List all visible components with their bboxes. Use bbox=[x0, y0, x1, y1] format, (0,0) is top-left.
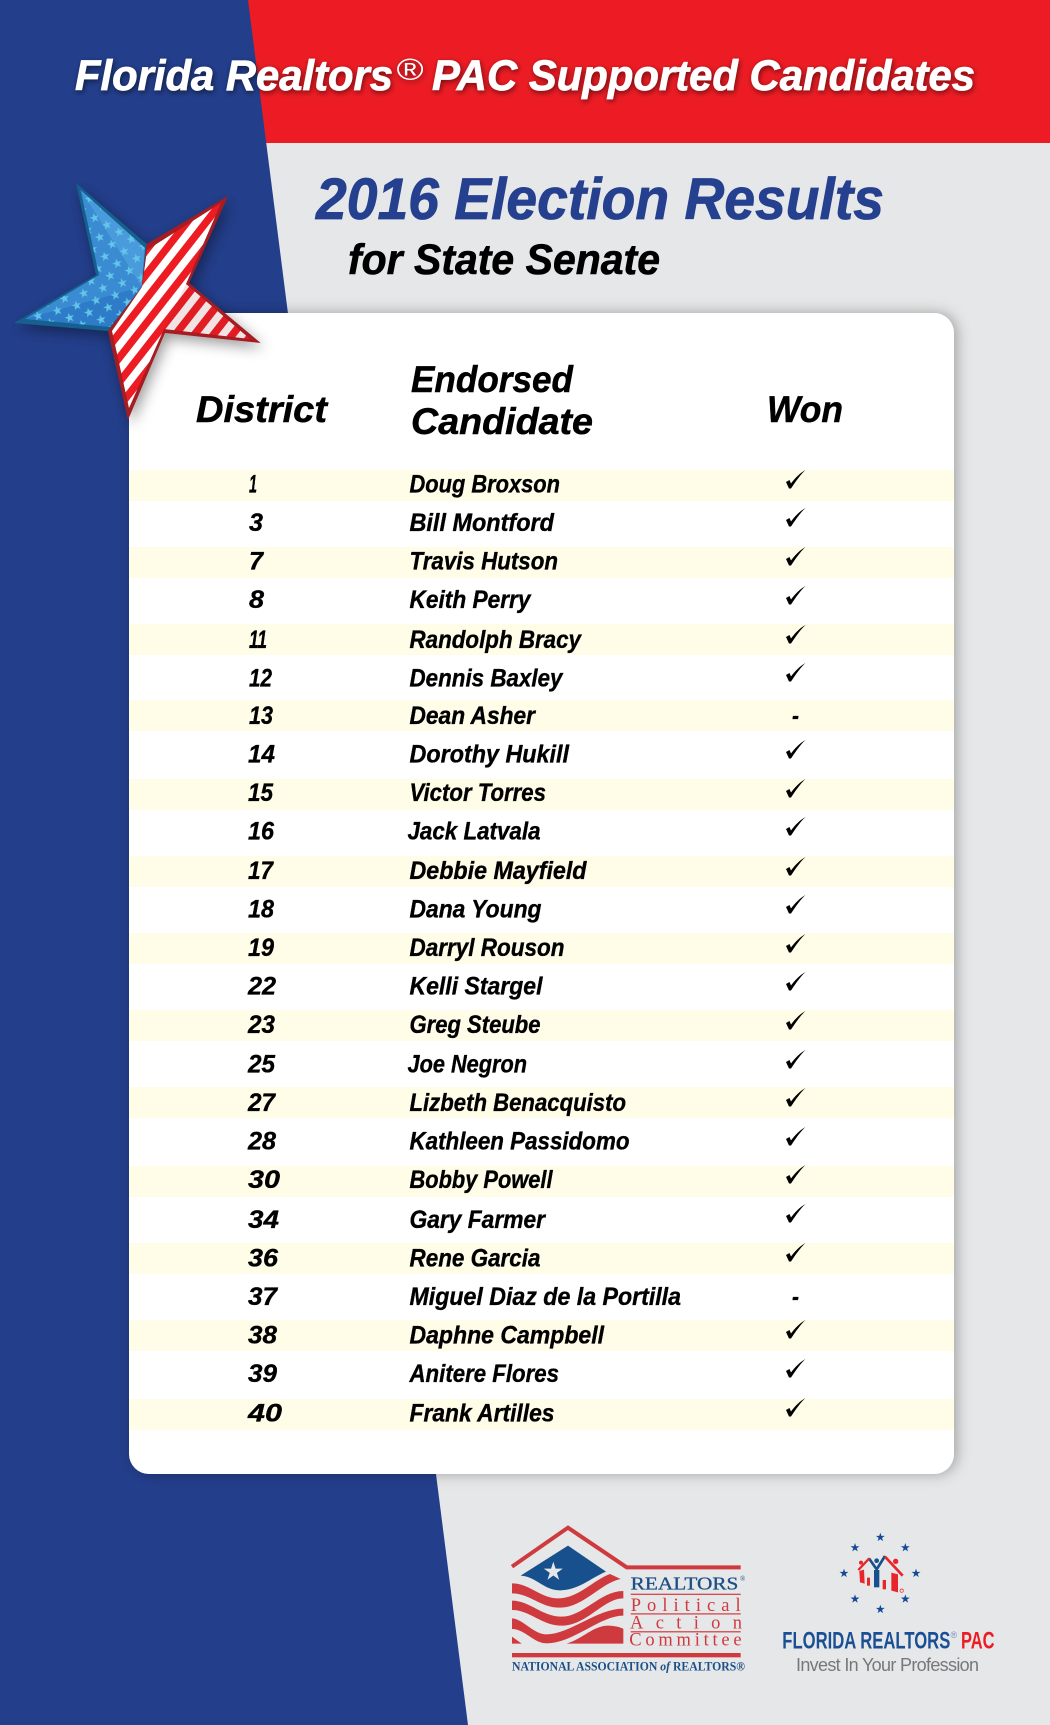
row: district 1: Doug Broxson bbox=[410, 471, 560, 499]
row: district 7: Travis Hutson bbox=[410, 548, 558, 576]
row: district 15: 15 bbox=[248, 779, 274, 807]
row: district 23 bbox=[247, 1011, 805, 1039]
row: district 37: - bbox=[792, 1283, 799, 1311]
row: district 27: 27 bbox=[247, 1089, 276, 1117]
row: district 25: 25 bbox=[247, 1051, 276, 1079]
row: district 14 bbox=[248, 740, 806, 768]
row: district 11: Randolph Bracy bbox=[410, 626, 582, 654]
row: district 28: Kathleen Passidomo bbox=[410, 1128, 630, 1156]
table row bands bbox=[129, 470, 954, 1430]
logo: Florida Realtors PAC: FLORIDA REALTORS bbox=[782, 1627, 950, 1654]
logo: Florida Realtors PAC: Invest In Your Profession bbox=[796, 1655, 979, 1675]
blue diagonal panel bbox=[0, 0, 468, 1725]
row: district 18: 18 bbox=[248, 896, 274, 924]
row: district 7 bbox=[249, 547, 806, 576]
row: district 16: 16 bbox=[248, 817, 275, 845]
row: district 25 bbox=[247, 1050, 805, 1079]
row: district 19: 19 bbox=[248, 934, 274, 962]
row: district 22 bbox=[247, 972, 805, 1000]
row: district 38: 38 bbox=[248, 1321, 277, 1349]
row: district 30: Bobby Powell bbox=[410, 1166, 553, 1194]
column header: Won: Won bbox=[767, 389, 843, 430]
row: district 23: 23 bbox=[247, 1011, 275, 1039]
row: district 36: 36 bbox=[248, 1244, 279, 1272]
row: district 13: 13 bbox=[249, 702, 273, 730]
logo: Florida Realtors PAC bbox=[782, 1533, 994, 1675]
row: district 14: 14 bbox=[248, 740, 275, 768]
row: district 34: Gary Farmer bbox=[410, 1206, 546, 1234]
row: district 15: Victor Torres bbox=[410, 779, 546, 807]
row: district 22: 22 bbox=[247, 972, 276, 1000]
row: district 19 bbox=[248, 934, 806, 962]
row: district 37: Miguel Diaz de la Portilla bbox=[410, 1283, 681, 1311]
row: district 37: 37 bbox=[248, 1283, 278, 1311]
row: district 16: Jack Latvala bbox=[408, 817, 541, 845]
row: district 40: Frank Artilles bbox=[410, 1400, 555, 1428]
row: district 16 bbox=[248, 817, 806, 845]
row: district 13: - bbox=[792, 702, 799, 730]
row: district 39: 39 bbox=[248, 1360, 277, 1388]
row: district 34: 34 bbox=[248, 1206, 279, 1234]
row: district 38: Daphne Campbell bbox=[410, 1321, 605, 1349]
row: district 15 bbox=[248, 779, 806, 807]
row: district 1: 1 bbox=[249, 471, 257, 499]
row: district 8: 8 bbox=[249, 586, 264, 614]
row: district 23: Greg Steube bbox=[410, 1011, 541, 1039]
title bbox=[75, 52, 975, 100]
row: district 17 bbox=[248, 857, 806, 885]
row: district 3: Bill Montford bbox=[410, 509, 555, 537]
row: district 38 bbox=[248, 1320, 806, 1349]
row: district 27 bbox=[247, 1088, 805, 1117]
row: district 27: Lizbeth Benacquisto bbox=[410, 1089, 626, 1117]
row: district 34 bbox=[248, 1204, 806, 1234]
logo: Florida Realtors PAC: PAC bbox=[961, 1627, 994, 1654]
row: district 11: 11 bbox=[249, 626, 267, 654]
subheading: for State Senate: for State Senate bbox=[348, 236, 660, 284]
row: district 13 bbox=[249, 702, 799, 730]
column header: District: District bbox=[196, 389, 329, 430]
row: district 12: 12 bbox=[249, 664, 272, 692]
title: PAC Supported Candidates bbox=[432, 52, 975, 100]
row: district 18: Dana Young bbox=[410, 896, 542, 924]
logo: Florida Realtors PAC: ® bbox=[950, 1630, 958, 1640]
row: district 7: 7 bbox=[249, 548, 264, 576]
row: district 40 bbox=[247, 1398, 806, 1428]
logo wordmark: Action bbox=[630, 1613, 742, 1633]
panel: results table card bbox=[129, 313, 954, 1474]
row: district 30: 30 bbox=[248, 1166, 280, 1194]
title: Florida Realtors bbox=[75, 52, 393, 100]
column header: Endorsed Candidate: Endorsed bbox=[411, 359, 574, 400]
title: ® bbox=[396, 52, 423, 87]
heading: 2016 Election Results: 2016 Election Results bbox=[315, 167, 884, 232]
row: district 8: Keith Perry bbox=[410, 586, 531, 614]
row: district 36 bbox=[248, 1243, 806, 1272]
row: district 8 bbox=[249, 586, 806, 614]
row: district 40: 40 bbox=[247, 1400, 282, 1428]
row: district 1 bbox=[249, 470, 806, 499]
row: district 37 bbox=[248, 1283, 799, 1311]
row: district 36: Rene Garcia bbox=[410, 1244, 541, 1272]
logo wordmark bbox=[512, 1574, 746, 1673]
column header: Endorsed Candidate bbox=[411, 359, 593, 442]
logo wordmark: ® bbox=[740, 1575, 746, 1583]
logo wordmark: Political bbox=[631, 1596, 741, 1616]
row: district 25: Joe Negron bbox=[408, 1051, 527, 1079]
icon: stars and houses bbox=[840, 1533, 920, 1613]
row: district 12 bbox=[249, 663, 806, 692]
row: district 28: 28 bbox=[247, 1128, 276, 1156]
row: district 3 bbox=[249, 508, 806, 537]
row: district 22: Kelli Stargel bbox=[410, 972, 543, 1000]
icon: patriotic star bbox=[14, 183, 261, 420]
logo wordmark: REALTORS bbox=[631, 1574, 738, 1594]
row: district 30 bbox=[248, 1165, 806, 1194]
row: district 17: 17 bbox=[248, 857, 274, 885]
row: district 11 bbox=[249, 625, 806, 654]
row: district 18 bbox=[248, 895, 806, 924]
row: district 12: Dennis Baxley bbox=[410, 664, 563, 692]
row: district 14: Dorothy Hukill bbox=[410, 740, 570, 768]
logo: REALTORS Political Action Committee bbox=[512, 1528, 746, 1673]
row: district 17: Debbie Mayfield bbox=[410, 857, 587, 885]
row: district 3: 3 bbox=[249, 509, 263, 537]
red header band bbox=[240, 0, 1050, 143]
column header: Endorsed Candidate: Candidate bbox=[411, 401, 593, 442]
row: district 28 bbox=[247, 1127, 805, 1156]
logo mark: house and flag bbox=[512, 1528, 741, 1657]
row: district 39: Anitere Flores bbox=[409, 1360, 559, 1388]
row: district 13: Dean Asher bbox=[410, 702, 536, 730]
logo wordmark: NATIONAL ASSOCIATION of REALTORS® bbox=[512, 1658, 745, 1673]
row: district 39 bbox=[248, 1359, 806, 1388]
row: district 19: Darryl Rouson bbox=[410, 934, 564, 962]
logo wordmark: Committee bbox=[629, 1631, 742, 1651]
